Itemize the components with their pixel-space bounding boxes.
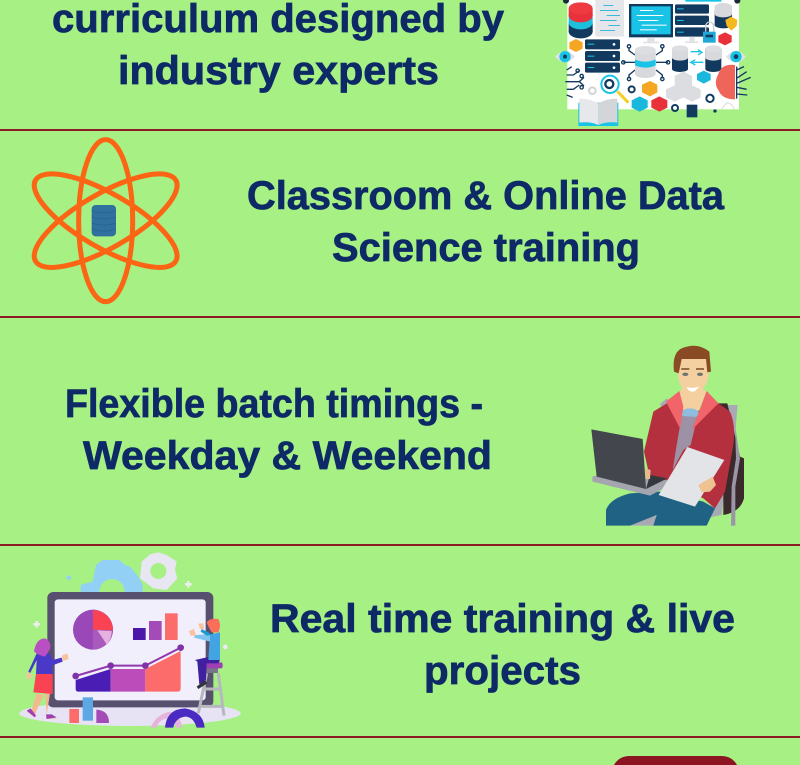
heading: flexible batch timings [65, 382, 492, 478]
heading: real time training and live projects: Real time training & live [270, 597, 735, 641]
heading: classroom and online data science training [247, 174, 725, 270]
heading: classroom and online data science training: Classroom & Online Data [247, 174, 725, 218]
heading: real time training and live projects [270, 597, 735, 693]
icon: student with laptop [591, 346, 744, 526]
panel: real time training [19, 552, 735, 728]
heading: curriculum designed by industry experts: industry experts [118, 49, 439, 93]
heading: classroom and online data science training: Science training [332, 226, 640, 270]
heading: flexible batch timings: Flexible batch timings - [65, 382, 483, 426]
heading: real time training and live projects: projects [424, 649, 581, 693]
button: bottom cropped badge [612, 756, 739, 765]
panel: flexible batch timings [65, 346, 744, 526]
heading: curriculum designed by industry experts [52, 0, 505, 93]
icon: atom with database [22, 140, 189, 302]
icon: dashboard presentation [19, 552, 241, 728]
icon: data science collage [555, 0, 751, 126]
panel: classroom and online [22, 140, 725, 302]
panel: curriculum [52, 0, 751, 126]
heading: flexible batch timings: Weekday & Weekend [83, 434, 492, 478]
